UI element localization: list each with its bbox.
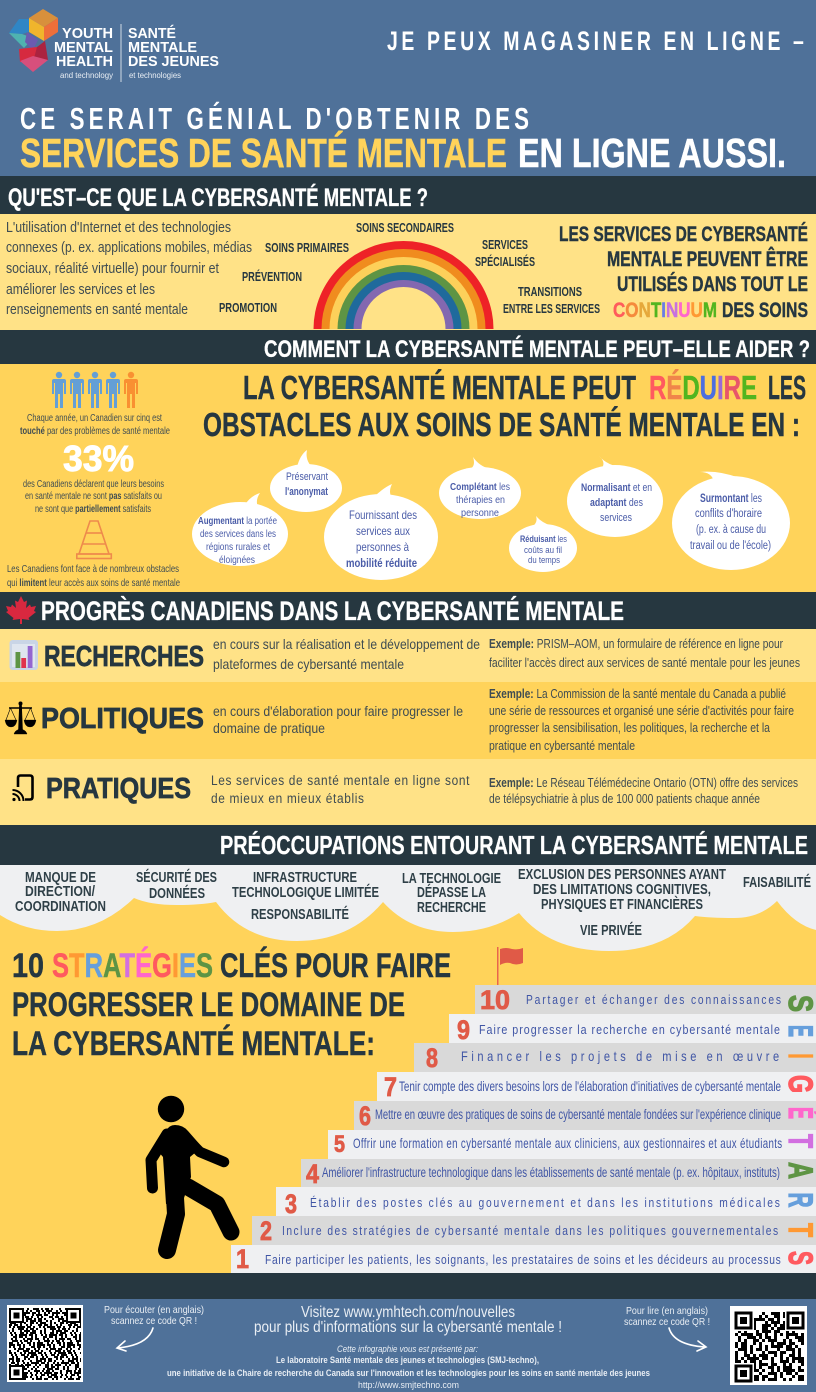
step 6: 6 — [359, 1101, 371, 1131]
text: exemple politiques: pratique en cybersanté mentale — [489, 739, 635, 753]
speech bubble: normalisant: Normalisant et en — [581, 482, 652, 494]
text: pour écouter: scannez ce code QR ! — [111, 1315, 197, 1327]
panel: définition et continuum — [0, 214, 816, 330]
text: pour lire: Pour lire (en anglais) — [626, 1305, 708, 1317]
labels: concerns: SÉCURITÉ DES — [136, 869, 217, 886]
speech bubble: augmentant la portée: Augmentant la portée — [198, 516, 277, 527]
text: un Canadien sur cinq: Chaque année, un Canadien sur cinq est — [27, 413, 162, 424]
section banner: qu'est-ce que — [0, 176, 816, 214]
icon: maple leaf — [6, 596, 36, 624]
text block: définition: améliorer les services et les — [6, 282, 155, 298]
step 9: Faire progresser la recherche en cybersanté mentale — [479, 1022, 780, 1037]
icon: connected phone — [12, 776, 32, 801]
speech bubble: augmentant la portée — [192, 493, 288, 566]
QR code: lire — [730, 1306, 807, 1385]
statistic: 33%: 33% — [63, 438, 134, 479]
speech bubble: mobilité réduite — [324, 484, 438, 580]
text: politiques description: en cours d'élaboration pour faire progresser le — [213, 703, 463, 719]
icon: traffic cone — [77, 521, 111, 558]
text block: définition: renseignements en santé mentale — [6, 302, 188, 318]
heading: je peux magasiner en ligne: JE PEUX MAGASINER EN LIGNE – — [387, 26, 804, 56]
speech bubble: normalisant — [567, 456, 663, 537]
text: un Canadien sur cinq: touché par des problèmes de santé mentale — [20, 426, 170, 437]
step 8: 8 — [426, 1043, 438, 1073]
logo: Youth Mental Health and Technology: MENTAL — [54, 39, 113, 56]
labels: concerns: RESPONSABILITÉ — [251, 906, 349, 923]
step 2: 2 — [260, 1216, 272, 1246]
arrow: to left QR — [117, 1328, 153, 1351]
heading: pratiques: PRATIQUES — [46, 773, 191, 805]
step 7 — [377, 1072, 816, 1102]
step 9: 9 — [457, 1015, 470, 1045]
speech bubble: complétant les thérapies: thérapies en — [456, 494, 505, 506]
logo: Youth Mental Health and Technology — [9, 9, 219, 82]
heading: recherches: RECHERCHES — [44, 641, 204, 673]
step 10: Partager et échanger des connaissances — [526, 994, 781, 1007]
logo: Youth Mental Health and Technology: YOUTH — [62, 25, 113, 42]
speech bubble: réduisant les coûts: du temps — [528, 555, 560, 566]
text: credits: Le laboratoire Santé mentale des jeunes et technologies (SMJ-techno), — [276, 1355, 539, 1366]
speech bubble: surmontant les conflits: travail ou de l'école) — [690, 540, 771, 552]
icon: five people, one in five — [52, 372, 138, 408]
text block: définition: sociaux, réalité virtuelle) pour fournir et — [6, 261, 219, 277]
labels: concerns: DONNÉES — [149, 885, 205, 902]
callout: continuum des soins — [559, 223, 808, 322]
panel: header — [0, 0, 816, 176]
panel row: recherches — [0, 629, 816, 682]
labels: concerns: LA TECHNOLOGIE — [402, 871, 501, 887]
labels: concerns: DÉPASSE LA — [417, 884, 486, 901]
title line 2: SERVICES DE SANTÉ MENTALE — [20, 130, 507, 176]
speech bubble: augmentant la portée: éloignées — [219, 555, 255, 566]
speech bubble: préservant l'anonymat — [270, 450, 342, 512]
logo: Youth Mental Health and Technology: SANTÉ — [128, 25, 176, 42]
text: credits: Cette infographie vous est présenté par: — [337, 1344, 478, 1355]
text: besoins non satisfaits: ne sont que partiellement satisfaits — [35, 504, 151, 515]
logo: Youth Mental Health and Technology: and technology — [60, 71, 113, 80]
text: pour lire — [624, 1305, 710, 1328]
text: obstacles: Les Canadiens font face à de nombreux obstacles — [7, 563, 179, 575]
heading: politiques: POLITIQUES — [41, 703, 204, 735]
speech bubble: complétant les thérapies — [439, 457, 521, 519]
panel row: politiques — [0, 682, 816, 759]
icon: flag at top of stairs — [497, 947, 523, 985]
step 3: Établir des postes clés au gouvernement et dans les institutions médicales — [310, 1196, 780, 1210]
labels: concerns: INFRASTRUCTURE — [253, 870, 357, 886]
step 5 — [328, 1130, 816, 1159]
step 10: 10 — [480, 985, 510, 1015]
title line 1: CE SERAIT GÉNIAL D'OBTENIR DES — [20, 100, 529, 136]
logo: Youth Mental Health and Technology: DES JEUNES — [128, 53, 219, 70]
step 5: Offrir une formation en cybersanté mentale aux cliniciens, aux gestionnaires et aux étudiants — [353, 1137, 782, 1151]
text: exemple politiques — [489, 687, 794, 753]
text: obstacles — [7, 563, 180, 589]
step 4 — [301, 1159, 816, 1189]
chart: rainbow continuum arch — [314, 241, 494, 329]
text: recherches description — [213, 636, 480, 672]
step 3 — [276, 1187, 816, 1219]
section banner: comment aider — [0, 330, 816, 364]
speech bubble: surmontant les conflits — [672, 472, 790, 570]
labels: continuum stages: SERVICES — [482, 237, 528, 252]
step 1: 1 — [236, 1244, 249, 1274]
step 1: Faire participer les patients, les soignants, les prestataires de soins et les décideurs au processus — [265, 1254, 781, 1267]
text: pratiques description: de mieux en mieux établis — [211, 790, 364, 806]
step 1 — [231, 1244, 816, 1274]
text: pratiques description: Les services de santé mentale en ligne sont — [211, 772, 470, 788]
section banner: progrès canadiens — [0, 592, 816, 629]
text: visitez: Visitez www.ymhtech.com/nouvelles — [301, 1304, 515, 1321]
step 8 — [414, 1043, 816, 1073]
text: politiques description: domaine de pratique — [213, 720, 325, 736]
heading: réduire les obstacles: LA CYBERSANTÉ MENTALE PEUT — [243, 369, 636, 406]
speech bubble: mobilité réduite: Fournissant des — [349, 508, 417, 522]
text: credits: http://www.smjtechno.com — [358, 1380, 459, 1391]
panel: obstacles — [0, 364, 816, 593]
labels: concerns: DIRECTION/ — [25, 884, 95, 900]
labels: concerns: EXCLUSION DES PERSONNES AYANT — [518, 867, 726, 883]
labels: continuum stages: SPÉCIALISÉS — [475, 254, 535, 269]
text: pour écouter — [104, 1304, 204, 1327]
text: credits — [167, 1344, 650, 1391]
heading: réduire les obstacles — [203, 369, 806, 443]
text: politiques description — [213, 703, 463, 736]
speech bubble: mobilité réduite: personnes à — [356, 540, 409, 554]
callout: continuum des soins: CONTINUUM — [613, 299, 717, 322]
labels: continuum stages — [219, 220, 600, 316]
speech bubble: surmontant les conflits: (p. ex. à cause du — [696, 524, 766, 536]
section banner: préoccupations — [0, 825, 816, 865]
heading: réduire les obstacles: RÉDUIRE — [649, 369, 757, 406]
text: besoins non satisfaits: des Canadiens déclarent que leurs besoins — [23, 479, 164, 490]
heading: 10 stratégies clés: STRATÉGIES — [52, 947, 213, 985]
logo: Youth Mental Health and Technology: MENTALE — [128, 39, 197, 56]
speech bubble: mobilité réduite: mobilité réduite — [346, 556, 417, 570]
labels: concerns: PHYSIQUES ET FINANCIÈRES — [541, 896, 703, 913]
vertical word: stratégies — [781, 995, 816, 1265]
step 5: 5 — [334, 1131, 345, 1158]
labels: concerns: TECHNOLOGIQUE LIMITÉE — [232, 884, 379, 901]
panel row: pratiques — [0, 759, 816, 825]
text block: définition: L'utilisation d'Internet et des technologies — [6, 220, 231, 236]
text: recherches description: plateformes de cybersanté mentale — [213, 656, 404, 672]
step 6 — [354, 1101, 816, 1131]
icon: scales of justice — [5, 702, 36, 734]
heading: 10 stratégies clés: CLÉS POUR FAIRE — [220, 947, 451, 985]
QR code: écouter — [7, 1305, 83, 1382]
heading: 10 stratégies clés: 10 — [12, 947, 44, 985]
text: credits: une initiative de la Chaire de recherche du Canada sur l'innovation et les technologies pour les soins en santé mentale des jeunes — [167, 1368, 650, 1379]
labels: concerns: RECHERCHE — [417, 900, 486, 916]
step 10 — [475, 985, 816, 1015]
text: pratiques description — [211, 772, 470, 806]
text: pour lire: scannez ce code QR ! — [624, 1316, 710, 1328]
text: besoins non satisfaits: en santé mentale ne sont pas satisfaits ou — [25, 491, 162, 502]
step 8: Financer les projets de mise en œuvre — [461, 1049, 779, 1064]
heading: 10 stratégies clés: LA CYBERSANTÉ MENTALE: — [12, 1025, 375, 1063]
labels: continuum stages: TRANSITIONS — [518, 284, 582, 299]
labels: continuum stages: ENTRE LES SERVICES — [503, 301, 600, 316]
speech bubble: augmentant la portée: régions rurales et — [206, 542, 270, 553]
labels: concerns: COORDINATION — [15, 899, 106, 915]
labels: concerns — [15, 867, 811, 939]
text: exemple pratiques: de télépsychiatrie à plus de 100 000 patients chaque année — [489, 792, 760, 806]
labels: concerns: VIE PRIVÉE — [580, 922, 642, 939]
speech bubble: normalisant: adaptant des — [590, 497, 643, 509]
logo: Youth Mental Health and Technology: et technologies — [129, 71, 181, 80]
labels: continuum stages: SOINS SECONDAIRES — [356, 220, 454, 235]
section banner: qu'est-ce que: QU'EST–CE QUE LA CYBERSANTÉ MENTALE ? — [8, 183, 428, 212]
step 9 — [449, 1014, 816, 1045]
speech bubble: préservant l'anonymat: Préservant — [286, 471, 328, 483]
logo: Youth Mental Health and Technology: HEALTH — [56, 53, 113, 70]
step 2 — [252, 1216, 816, 1246]
speech bubble: augmentant la portée: des services dans les — [200, 529, 276, 540]
heading: progrès canadiens: PROGRÈS CANADIENS DANS LA CYBERSANTÉ MENTALE — [41, 595, 624, 626]
labels: continuum stages: PRÉVENTION — [242, 269, 302, 284]
labels: concerns: MANQUE DE — [25, 870, 96, 886]
panel: préoccupations clouds — [0, 865, 816, 951]
text: visitez: pour plus d'informations sur la cybersanté mentale ! — [254, 1319, 562, 1336]
panel: footer — [0, 1299, 816, 1392]
labels: continuum stages: SOINS PRIMAIRES — [265, 240, 349, 255]
labels: concerns: DES LIMITATIONS COGNITIVES, — [533, 882, 711, 898]
step 3: 3 — [285, 1189, 297, 1219]
text block: définition — [6, 220, 252, 318]
speech bubble: mobilité réduite: services aux — [356, 524, 410, 538]
speech bubble: complétant les thérapies: Complétant les — [450, 481, 510, 493]
speech bubble: réduisant les coûts — [509, 516, 577, 572]
text: obstacles: qui limitent leur accès aux soins de santé mentale — [7, 577, 180, 589]
text block: définition: connexes (p. ex. applications mobiles, médias — [6, 240, 252, 256]
dark strip above footer — [0, 1273, 816, 1299]
step 4: 4 — [306, 1159, 319, 1189]
text: un Canadien sur cinq — [20, 413, 170, 437]
panel: stratégies background — [0, 865, 816, 1273]
heading: 10 stratégies clés: PROGRESSER LE DOMAINE DE — [12, 986, 405, 1024]
text: exemple pratiques — [489, 776, 798, 806]
text: besoins non satisfaits — [23, 479, 164, 515]
speech bubble: préservant l'anonymat: l'anonymat — [285, 486, 328, 498]
speech bubble: normalisant: services — [600, 512, 632, 524]
icon: bar chart — [10, 640, 38, 670]
text: visitez — [254, 1304, 562, 1336]
text: exemple recherches — [489, 637, 800, 670]
text: pour écouter: Pour écouter (en anglais) — [104, 1304, 204, 1316]
text: exemple politiques: progresser la sensibilisation, les politiques, la recherche et la — [489, 721, 770, 735]
speech bubble: réduisant les coûts: coûts au fil — [524, 545, 562, 556]
speech bubble: complétant les thérapies: personne — [461, 507, 499, 519]
staircase: ten strategies — [231, 985, 816, 1274]
icon: walking person — [151, 1096, 231, 1250]
labels: continuum stages: PROMOTION — [219, 300, 277, 315]
arrow: to right QR — [669, 1328, 706, 1351]
step 2: Inclure des stratégies de cybersanté mentale dans les politiques gouvernementales — [282, 1225, 778, 1238]
speech bubble: surmontant les conflits: conflits d'horaire — [695, 508, 762, 520]
text: recherches description: en cours sur la réalisation et le développement de — [213, 636, 480, 652]
step 7: 7 — [384, 1072, 397, 1102]
speech bubble: surmontant les conflits: Surmontant les — [700, 493, 762, 505]
heading: 10 stratégies clés — [12, 947, 451, 1063]
speech bubble: réduisant les coûts: Réduisant les — [520, 534, 567, 545]
